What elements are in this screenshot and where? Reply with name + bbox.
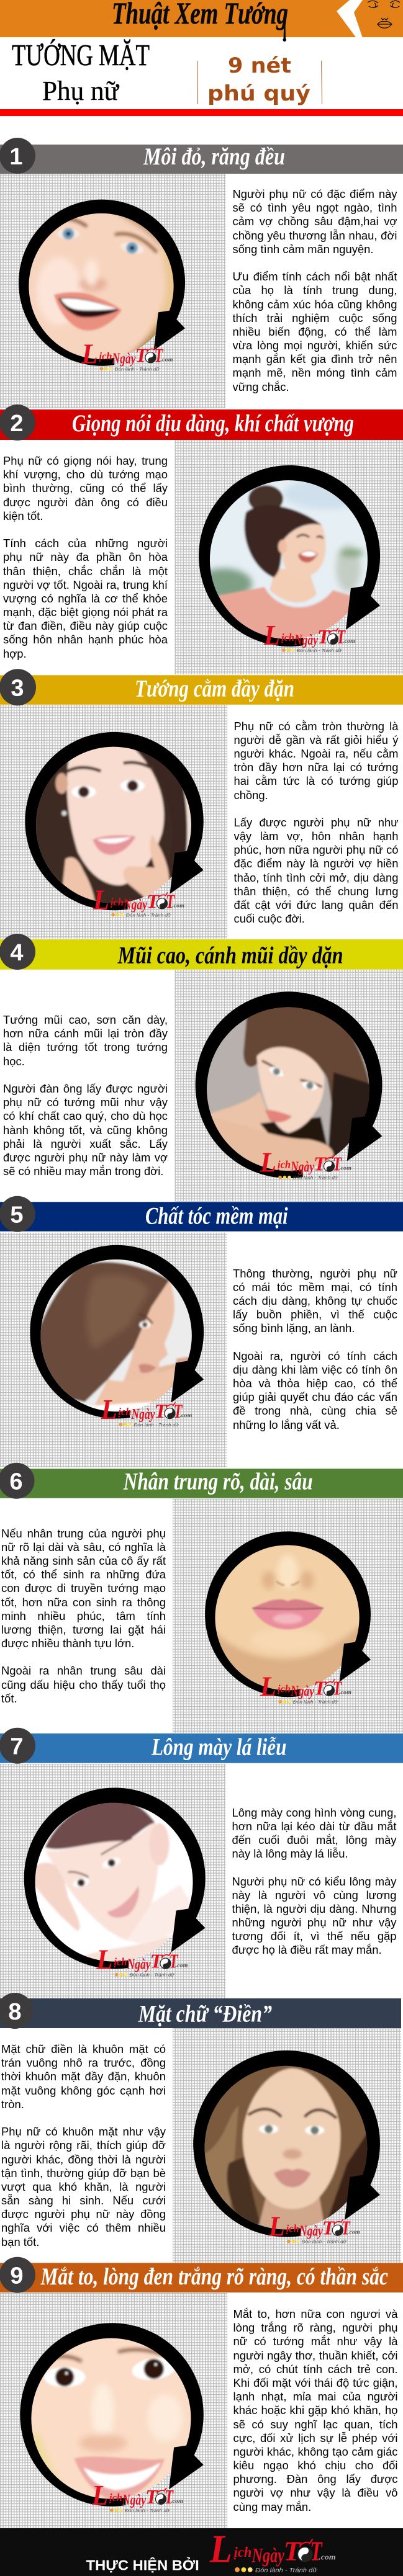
text block 8: là người rộng rãi, thích giúp đỡ (1, 2139, 166, 2152)
text block 4: phải là người xuất sắc. Lấy (3, 1137, 168, 1150)
logo: T (322, 2217, 335, 2239)
logo: T (317, 625, 330, 648)
panel: section 3 (0, 669, 403, 939)
text block 6: Ngoài ra nhân trung sâu dài (1, 1664, 166, 1677)
heading band 3: Tướng cằm đầy đặn (135, 676, 294, 702)
text block 2: thân thiện, chắc chắn là một (3, 565, 168, 577)
text block 1: thích trải nghiệm cuộc sống (232, 311, 397, 324)
logo: Ngày (299, 2224, 323, 2240)
callout: 9 nét phú quý: 9 nét (228, 53, 291, 78)
logo: ịch (277, 1159, 291, 1171)
photo ring: woman with willow brows (24, 1787, 206, 1969)
text block 9: Mắt to, hơn nữa con ngươi và (233, 2307, 397, 2320)
text block 7: đến cuối đuôi mắt, lông mày (232, 1833, 396, 1846)
credit text: THỰC HIỆN BỞI (86, 2556, 199, 2574)
text block 9: khác hoặc khi gặp khó khăn, họ (233, 2404, 397, 2417)
text block 3: vậy làm vợ, hôn nhân hạnh (233, 830, 399, 843)
text block 2: Phụ nữ có giọng nói hay, trung (3, 454, 168, 467)
logo: Ngày (123, 897, 147, 913)
logo (101, 1393, 192, 1428)
text block 4: Người đàn ông lấy được người (3, 1082, 168, 1095)
text block 9: kiêu ngạo khó chịu cho đối (233, 2459, 397, 2472)
text block 2: sống hôn nhân hạnh phúc hòa (3, 633, 168, 646)
logo: Đón lành - Tránh dữ (134, 1422, 179, 1428)
text block 3: hai cằm tức là có tướng giúp (233, 774, 399, 787)
logo (81, 338, 173, 372)
logo: Đón lành - Tránh dữ (297, 648, 342, 653)
text block 4: sẽ có nhiều may mắn trong đời. (3, 1165, 163, 1178)
logo: Đón lành - Tránh dữ (126, 912, 171, 918)
text block 6: được nhiều thành tựu lớn. (1, 1637, 134, 1650)
footer logo: .com (319, 2552, 336, 2561)
text block 3: người khác. Ngoài ra, nếu cằm (233, 747, 399, 760)
number badge 3: 3 (11, 676, 24, 702)
logo: T (314, 1677, 327, 1699)
text block 8: tận tình, thường giúp đỡ bạn bè (1, 2167, 166, 2180)
heading band 4 (0, 939, 403, 970)
logo: Đón lành - Tránh dữ (293, 1699, 338, 1705)
logo: ịch (114, 1956, 127, 1968)
logo: L (101, 1393, 117, 1425)
number badge 3 (0, 669, 36, 705)
text block 7: Lông mày cong hình vòng cung, (232, 1806, 396, 1819)
heading band 3 (0, 675, 403, 705)
hatched photo background (0, 1233, 227, 1467)
text block 2: phụ nữ này đa phần ôn hòa (3, 550, 168, 563)
text block 2: khí vượng, cho dù tướng mạo (3, 468, 168, 481)
text block 5: sống bình lặng, an lành. (233, 1322, 355, 1335)
text block 1: của họ là tính trung dung, (232, 284, 397, 297)
text block 7 (232, 1806, 396, 1956)
callout: 9 nét phú quý: phú quý (207, 81, 310, 106)
footer logo: L (209, 2526, 232, 2570)
logo: T (174, 1400, 183, 1422)
text block 3: thảo, tính tình cởi mở, dịu dàng (233, 871, 399, 884)
number badge 8 (0, 1993, 33, 2029)
logo (260, 1147, 351, 1181)
text block 6: cũng dấu hiệu cho thấy tuổi thọ (1, 1678, 166, 1691)
number badge 5: 5 (10, 1202, 24, 1228)
red divider (0, 109, 403, 116)
logo: T (145, 2485, 158, 2508)
footer (0, 2526, 403, 2576)
text block 8: bạn tốt. (1, 2235, 39, 2248)
logo: .com (348, 2229, 360, 2235)
text block 6: nữ rõ lại dài và sâu, có nghĩa là (1, 1541, 166, 1554)
logo: T (147, 890, 160, 912)
text block 1: nhiều biến động, có thể làm (232, 325, 397, 338)
text block 4 (3, 1013, 168, 1178)
heading band 5 (0, 1202, 403, 1232)
logo: .com (180, 1412, 192, 1418)
header panel (0, 0, 403, 116)
text block 6: Nếu nhân trung của người phụ (1, 1527, 166, 1540)
text block 4: học. (3, 1055, 25, 1068)
footer logo: T (310, 2536, 323, 2567)
logo: L (260, 1671, 276, 1702)
text block 2: bình thường, cũng có thể lấy (3, 481, 168, 494)
text block 4: được người phụ nữ này làm vợ (3, 1151, 168, 1164)
subheading: Phụ nữ: Phụ nữ (42, 76, 120, 106)
panel: section 5 (0, 1196, 403, 1467)
text block 2: từ đan điền, điều này giúp cuộc (3, 619, 168, 632)
text block 2: kiện tốt. (3, 509, 43, 522)
number badge 7 (0, 1728, 35, 1764)
text block 9: lạnh nhạt, mỉa mai của người (233, 2390, 397, 2403)
logo: .com (175, 1962, 188, 1969)
heading band 8 (0, 1998, 401, 2028)
text block 9: lòng trắng rõ ràng, người phụ (233, 2321, 397, 2334)
text block 8: sẵn sàng hi sinh. Nếu cưới (1, 2194, 166, 2207)
text block 8: tròn. (1, 2098, 24, 2111)
text block 1: sống tình cảm mãn nguyện. (232, 243, 373, 256)
text block 9: cực, đối xử lịch sự lễ phép với (233, 2431, 397, 2444)
footer logo: ịch (233, 2544, 252, 2560)
logo: Ngày (131, 1407, 155, 1423)
logo (91, 2479, 183, 2513)
panel: section 7 (0, 1727, 403, 1998)
text block 8: Phụ nữ có khuôn mặt như vậy (1, 2125, 166, 2138)
text block 7: thiện, là người dịu dàng. Nhưng (232, 1902, 396, 1915)
text block 5: Thông thường, người phụ nữ (233, 1267, 397, 1280)
text block 3: người dễ gần và rất giỏi hiểu ý (233, 733, 399, 746)
logo: T (135, 344, 148, 366)
text block 4: có khí chất cao quý, cho dù học (3, 1109, 168, 1122)
text block 7: hơn nữa lại kéo dài từ đầu mắt (232, 1820, 396, 1833)
heading band 7 (0, 1733, 403, 1763)
number badge 5 (0, 1196, 35, 1232)
hatched photo background (175, 440, 403, 674)
text block 8: trán vuông nhô ra trước, đồng (1, 2056, 166, 2069)
text block 1: không cảm xúc hóa cũng không (232, 298, 397, 310)
logo: L (268, 2211, 285, 2242)
number badge 2: 2 (10, 411, 24, 437)
text block 8 (1, 2042, 166, 2248)
text block 8: nghĩa với việc có thêm nhiều (1, 2221, 166, 2234)
logo: .com (343, 638, 355, 644)
logo: T (154, 344, 164, 366)
logo: T (166, 890, 175, 912)
text block 8: thời khuôn mặt đầy đặn, khuôn (1, 2070, 166, 2083)
logo: T (333, 1677, 342, 1699)
text block 3: đặc điểm này là người vợ hiền (233, 857, 399, 870)
text block 1: mạnh mẽ, nền móng tình cảm (232, 366, 397, 379)
logo: Ngày (122, 2492, 146, 2508)
text block 7: những người phụ nữ như vậy (232, 1916, 396, 1929)
number badge 1: 1 (9, 144, 23, 170)
text block 5: Ngoài ra, người có tính cách (233, 1349, 397, 1362)
panel: section 6 (0, 1463, 403, 1733)
panel: section 2 (0, 405, 403, 674)
number badge 4: 4 (10, 940, 24, 966)
footer logo: T (284, 2536, 302, 2567)
text block 4: hành không tốt, và cũng không (3, 1123, 168, 1137)
photo ring: woman with hands on chin (25, 732, 204, 910)
logo: ịch (118, 1406, 132, 1418)
logo: Đón lành - Tránh dữ (125, 2508, 170, 2513)
text block 5: đề trong nhà, cùng chia sẻ (233, 1404, 397, 1417)
number badge 7: 7 (10, 1734, 24, 1760)
panel: section 1 (0, 138, 403, 408)
logo: Đón lành - Tránh dữ (293, 1175, 338, 1181)
text block 6: khả năng sinh sản của cô ấy rất (1, 1554, 166, 1567)
hatched photo background (173, 2028, 401, 2263)
text block 6: tốt, hơn nữa con sinh ra thông (1, 1596, 166, 1609)
text block 1: cảm vợ chồng sâu đậm,hai vợ (232, 215, 397, 228)
text block 4: là diện tướng tốt trong tướng (3, 1040, 168, 1053)
text block 3: tròn đầy hơn nữa lại có tướng (233, 761, 399, 774)
heading band 4: Mũi cao, cánh mũi dầy dặn (117, 942, 343, 969)
logo: T (169, 1950, 179, 1972)
hatched photo background (0, 705, 227, 939)
text block 5: những lo lắng vất vả. (233, 1418, 340, 1431)
logo: L (81, 338, 97, 369)
hatched photo background (175, 970, 403, 1202)
logo (268, 2211, 360, 2245)
footer logo: Ngày (251, 2544, 284, 2567)
logo: .com (171, 2498, 183, 2504)
text block 6: lương thiện, tương lai gặt hái (1, 1623, 166, 1636)
panel: section 4 (0, 934, 403, 1202)
text block 3 (233, 720, 399, 925)
logo (260, 1671, 351, 1705)
heading band 6: Nhân trung rõ, dài, sâu (123, 1469, 313, 1495)
panel: section 8 (0, 1993, 401, 2263)
text block 2: mạnh, đặc biệt giọng nói phát ra (3, 606, 168, 619)
text block 2: hợp. (3, 647, 27, 660)
number badge 9: 9 (10, 2263, 24, 2289)
footer logo (209, 2526, 336, 2574)
hatched photo background (0, 174, 226, 408)
text block 7: tương đối ít, vì thế nếu gặp (232, 1930, 396, 1943)
number badge 6 (0, 1463, 35, 1499)
photo ring: woman with hair bun (196, 465, 380, 646)
logo: L (93, 883, 109, 915)
text block 5: dịu dàng khi làm việc có tính ôn (233, 1363, 397, 1376)
text block 1: mạnh gắn kết gia đình trở nên (232, 352, 397, 365)
text block 3: đất cật với đức lang quân đến (233, 898, 399, 911)
panel: section 9 (0, 2257, 403, 2528)
text block 9: cùng may mắn. (233, 2500, 311, 2513)
text block 8: được người phụ nữ này đồng (1, 2207, 166, 2220)
logo: T (342, 2217, 351, 2239)
text block 8: người khác, đồng thời là người (1, 2153, 166, 2165)
text block 5: giúp giải quyết chu đáo các vấn (233, 1390, 397, 1403)
heading band 1 (0, 143, 403, 174)
heading band 7: Lông mày lá liễu (151, 1733, 287, 1760)
text block 5: cách dịu dàng, không tự chuốc (233, 1294, 397, 1307)
logo: T (154, 1400, 168, 1422)
text block 9: nữ có tướng mắt như vậy là (233, 2335, 397, 2348)
text block 5: hòa và thỏa hiệp cao, có thể (233, 1377, 397, 1390)
logo: T (314, 1153, 327, 1175)
logo: ịch (286, 2223, 299, 2235)
number badge 2 (0, 405, 35, 441)
footer logo: Đón lành - Tránh dữ (255, 2567, 318, 2574)
logo: Đón lành - Tránh dữ (129, 1972, 175, 1978)
text block 8: vượt qua khó khăn, là người (1, 2180, 166, 2193)
logo: Ngày (290, 1160, 314, 1176)
text block 2: được người đàn ông có điều (3, 496, 168, 509)
text block 1: Ưu điểm tính cách nổi bật nhất (232, 270, 397, 283)
text block 5 (233, 1267, 397, 1431)
text block 6: tốt. (1, 1692, 17, 1705)
text block 8: Mặt chữ điền là khuôn mặt có (1, 2042, 166, 2055)
text block 2: người vợ tốt. Ngoài ra, trung khí (3, 578, 168, 591)
number badge 1 (0, 138, 35, 174)
logo: T (165, 2485, 174, 2508)
logo: Đón lành - Tránh dữ (302, 2239, 347, 2245)
orange title band (0, 0, 403, 37)
logo: ịch (99, 350, 112, 362)
logo: T (337, 625, 346, 648)
text block 1: chồng yêu thương lẫn nhau, đời (232, 229, 397, 242)
text block 6: minh nhiều phúc, tâm tính (1, 1609, 166, 1622)
hatched photo background (173, 1499, 403, 1733)
text block 1: vừa lòng mọi người, khiến sức (232, 339, 397, 352)
text block 4: Tướng mũi cao, sơn căn dày, (3, 1013, 168, 1026)
number badge 6: 6 (9, 1469, 23, 1495)
logo: Đón lành - Tránh dữ (114, 366, 160, 372)
logo: Ngày (127, 1957, 151, 1973)
text block 9: người vợ như vậy là điều vô (233, 2486, 397, 2499)
text block 3: thân thiện, có thể chung lưng (233, 885, 399, 898)
text block 3: chồng. (233, 789, 268, 802)
text block 7: này là người vô cùng lương (232, 1889, 396, 1902)
callout: 9 nét phú quý (197, 53, 322, 106)
text block 4: phụ nữ có tướng mũi như vậy (3, 1096, 168, 1109)
number badge 8: 8 (8, 1999, 22, 2025)
heading band 5: Chất tóc mềm mại (145, 1202, 288, 1229)
logo: ịch (110, 896, 124, 908)
logo: L (96, 1944, 112, 1975)
logo: .com (172, 902, 184, 908)
hatched photo background (0, 2293, 227, 2528)
text block 3: cuối cuộc đời. (233, 912, 305, 925)
logo (263, 619, 355, 653)
text block 2 (3, 454, 168, 660)
logo: ịch (109, 2492, 122, 2503)
heading band 1: Môi đỏ, răng đều (143, 143, 285, 170)
logo: .com (339, 1689, 351, 1696)
text block 3: Lấy được người phụ nữ như (233, 816, 399, 829)
white zigzag (337, 0, 363, 37)
logo: T (150, 1950, 163, 1972)
photo ring: woman with square face (193, 2051, 380, 2237)
text block 6 (1, 1527, 166, 1705)
text block 5: lấy buồn phiền, vì thế cuộc (233, 1308, 397, 1321)
logo: ịch (277, 1683, 291, 1695)
text block 8: mặt vuông không góc cạnh hơi (1, 2084, 166, 2097)
text block 7: được họ là điều rất may mắn. (232, 1943, 382, 1956)
text block 3: phúc, hơn nữa người phụ nữ có (233, 843, 399, 856)
logo: L (263, 619, 280, 651)
icon: face (368, 1, 400, 28)
heading: TƯỚNG MẶT: TƯỚNG MẶT (12, 38, 150, 72)
logo: ịch (281, 632, 294, 643)
logo: .com (339, 1165, 351, 1171)
text block 9: người khác, không tạo cảm giác (233, 2445, 397, 2458)
heading band 6 (0, 1469, 403, 1498)
text block 4: hơn nữa cánh mũi lại tròn đầy (3, 1027, 168, 1040)
photo ring: woman with big eyes and smile (20, 2323, 204, 2507)
text block 1 (232, 187, 397, 393)
text block 6: con được di truyền tướng mạo (1, 1581, 166, 1594)
text block 1: vững chắc. (232, 380, 289, 393)
text block 9: sẽ có suy nghĩ lạc quan, tích (233, 2417, 397, 2431)
text block 5: có mái tóc mềm mại, có tính (233, 1281, 397, 1294)
logo: L (260, 1147, 276, 1178)
logo (96, 1944, 188, 1978)
text block 9: mở, có chút tính cách trẻ con. (233, 2363, 397, 2376)
photo ring: woman with long brown hair (196, 991, 382, 1178)
text block 3: Phụ nữ có cằm tròn thường là (233, 720, 399, 733)
text block 7: này là lông mày lá liễu. (232, 1847, 348, 1860)
ink drip (283, 22, 286, 42)
text block 7: Người phụ nữ có kiểu lông mày (232, 1875, 396, 1888)
text block 9: người ngây thơ, thuần khiết, cởi (233, 2349, 397, 2362)
text block 9: phương. Đàn ông lấy được (233, 2472, 397, 2485)
photo ring: smiling woman (19, 200, 185, 366)
text block 1: Người phụ nữ có đặc điểm này (232, 187, 397, 200)
number badge 9 (0, 2257, 35, 2293)
logo: Ngày (112, 351, 136, 367)
logo: T (333, 1153, 342, 1175)
logo: Ngày (294, 632, 318, 648)
number badge 4 (0, 934, 35, 970)
text block 9 (233, 2307, 397, 2513)
photo ring: woman with silky hair (30, 1245, 204, 1419)
text block 2: vượng có nghĩa là cơ thể khỏe (3, 592, 168, 605)
heading band 8: Mặt chữ “Điền” (138, 2000, 272, 2027)
photo ring: nose and lips close-up (205, 1531, 371, 1697)
logo: Ngày (290, 1684, 314, 1700)
text block 9: Khi đối mặt với thái độ tức giận, (233, 2376, 397, 2389)
logo: .com (160, 356, 173, 362)
logo: L (91, 2479, 108, 2511)
text block 6: tốt, có thể sinh ra những đứa (1, 1568, 166, 1581)
text block 2: Tính cách của những người (3, 537, 168, 550)
logo (93, 883, 184, 918)
hatched photo background (0, 1764, 225, 1998)
text block 1: sẽ có tình yêu ngọt ngào, tình (232, 201, 397, 214)
